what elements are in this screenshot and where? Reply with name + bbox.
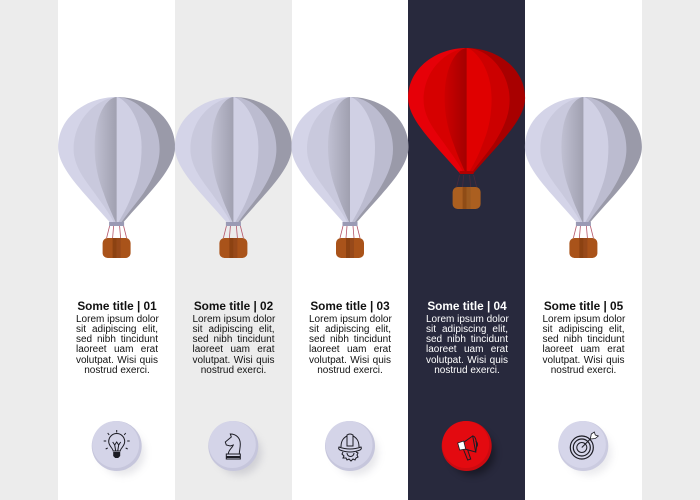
text block: item 03: nostrud exerci. bbox=[317, 365, 383, 376]
text block: item 04 highlighted: Some title | 04 bbox=[427, 299, 507, 313]
text block: item 04 highlighted: laoreet uam erat bbox=[426, 344, 508, 355]
icon: helmet with gear badge bbox=[325, 421, 378, 475]
text block: item 02: laoreet uam erat bbox=[192, 344, 274, 355]
icon: target with arrow badge bbox=[558, 421, 611, 475]
text block: item 05 bbox=[542, 299, 626, 376]
text block: item 01: sit adipiscing elit, bbox=[76, 324, 158, 335]
text block: item 04 highlighted: nostrud exerci. bbox=[434, 365, 500, 376]
panel: column 3 background bbox=[292, 0, 408, 500]
text block: item 03: sit adipiscing elit, bbox=[309, 324, 391, 335]
balloon 1 bbox=[58, 97, 175, 258]
panel: column 4 highlighted background bbox=[408, 0, 525, 500]
text block: item 02: Some title | 02 bbox=[194, 299, 273, 313]
text block: item 02: nostrud exerci. bbox=[201, 365, 266, 376]
text block: item 05: Lorem ipsum dolor bbox=[542, 314, 625, 325]
text block: item 02: sit adipiscing elit, bbox=[192, 324, 274, 335]
balloon 3 bbox=[292, 97, 408, 258]
text block: item 01: volutpat. Wisi quis bbox=[76, 355, 158, 366]
text block: item 01 bbox=[76, 299, 159, 376]
text block: item 04 highlighted: sed nibh tincidunt bbox=[426, 334, 508, 345]
panel: column 5 background bbox=[525, 0, 642, 500]
icon: megaphone badge highlighted bbox=[442, 421, 495, 475]
panel: column 2 background bbox=[175, 0, 292, 500]
text block: item 03: volutpat. Wisi quis bbox=[309, 355, 391, 366]
text block: item 01: Lorem ipsum dolor bbox=[76, 314, 159, 325]
text block: item 04 highlighted: sit adipiscing elit, bbox=[426, 324, 508, 335]
text block: item 03: laoreet uam erat bbox=[309, 344, 391, 355]
text block: item 04 highlighted: Lorem ipsum dolor bbox=[426, 314, 509, 325]
balloon 5 bbox=[525, 97, 642, 258]
text block: item 05: sit adipiscing elit, bbox=[542, 324, 624, 335]
text block: item 03: sed nibh tincidunt bbox=[309, 334, 391, 345]
text block: item 02: sed nibh tincidunt bbox=[192, 334, 274, 345]
text block: item 03: Some title | 03 bbox=[310, 299, 390, 313]
text block: item 05: laoreet uam erat bbox=[542, 344, 624, 355]
text block: item 05: Some title | 05 bbox=[544, 299, 623, 313]
text block: item 01: Some title | 01 bbox=[77, 299, 157, 313]
text block: item 02: Lorem ipsum dolor bbox=[192, 314, 275, 325]
text block: item 01: laoreet uam erat bbox=[76, 344, 158, 355]
text block: item 01: nostrud exerci. bbox=[84, 365, 150, 376]
text block: item 04 highlighted: volutpat. Wisi quis bbox=[426, 355, 508, 366]
text block: item 05: nostrud exerci. bbox=[551, 365, 616, 376]
balloon 4 highlighted red bbox=[408, 48, 525, 209]
text block: item 02 bbox=[192, 299, 276, 376]
text block: item 04 highlighted bbox=[426, 299, 509, 376]
text block: item 05: volutpat. Wisi quis bbox=[542, 355, 624, 366]
text block: item 02: volutpat. Wisi quis bbox=[192, 355, 274, 366]
icon: chess knight badge bbox=[208, 421, 261, 475]
text block: item 03 bbox=[309, 299, 392, 376]
text block: item 03: Lorem ipsum dolor bbox=[309, 314, 392, 325]
text block: item 01: sed nibh tincidunt bbox=[76, 334, 158, 345]
icon: light bulb badge bbox=[92, 421, 145, 475]
text block: item 05: sed nibh tincidunt bbox=[542, 334, 624, 345]
balloon 2 bbox=[175, 97, 292, 258]
panel: column 1 background bbox=[58, 0, 175, 500]
